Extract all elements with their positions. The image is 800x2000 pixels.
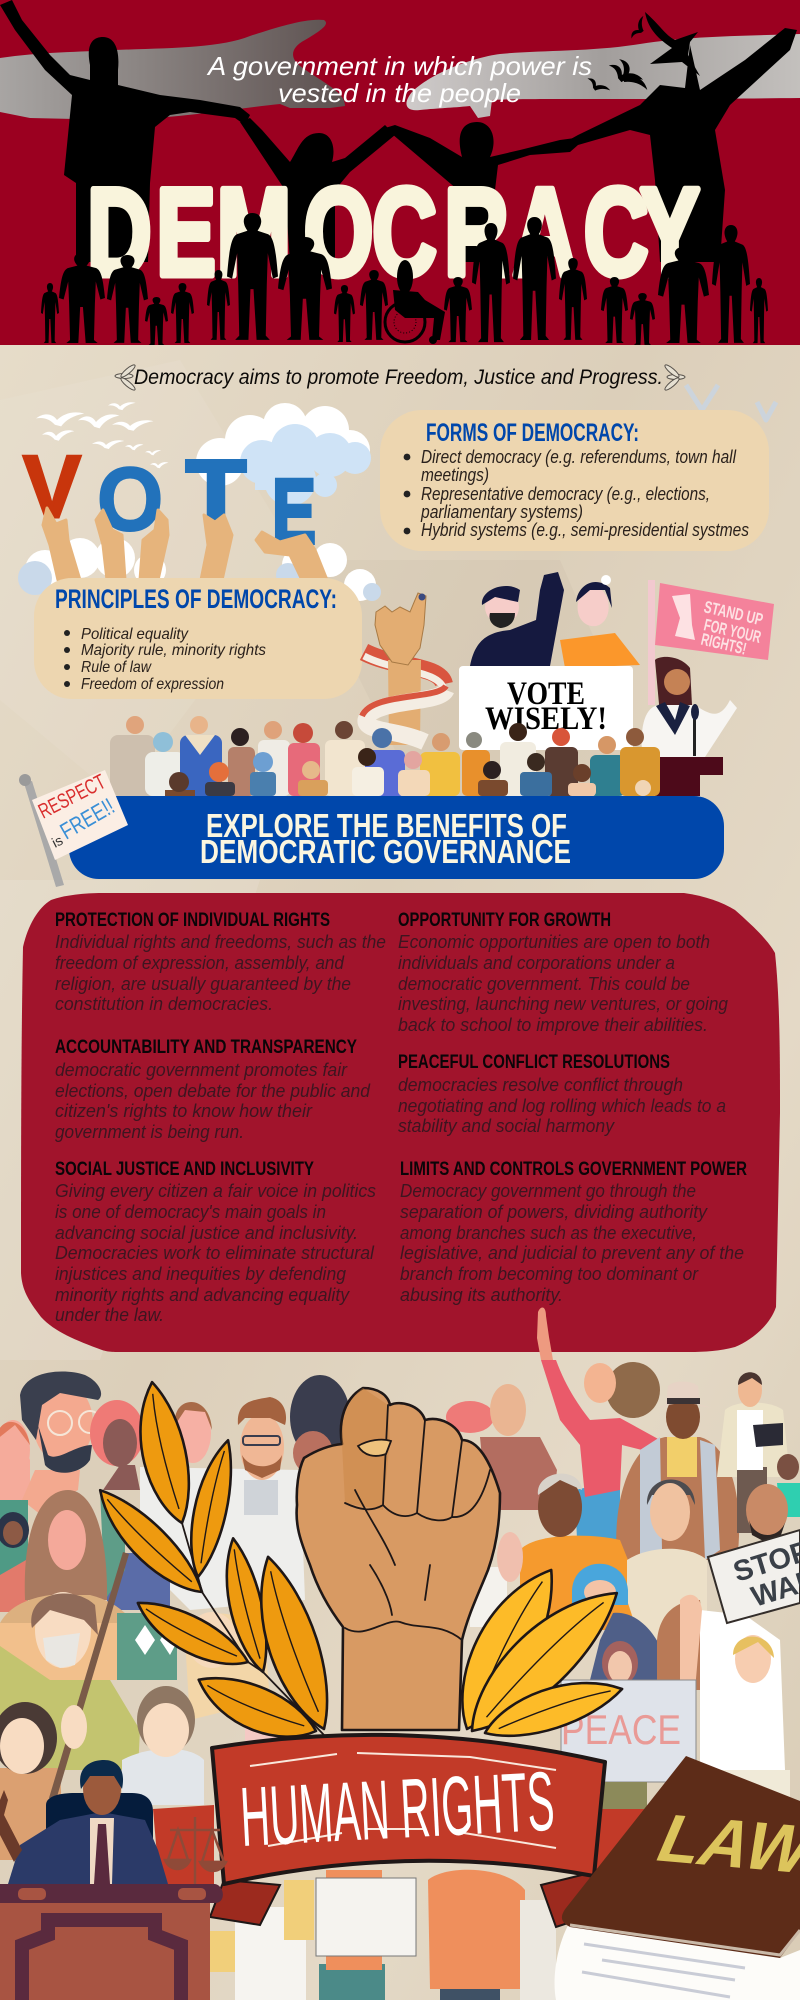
benefit: accountability: government is being run. [55, 1122, 244, 1142]
illustration: bottom crowd [0, 1360, 800, 2000]
banner: human rights [153, 1735, 645, 1927]
icon: raised fist [86, 1378, 634, 1753]
benefit: peaceful conflict: negotiating and log rolling which leads to a [398, 1096, 726, 1116]
benefit: peaceful conflict: PEACEFUL CONFLICT RESOLUTIONS [398, 1052, 670, 1073]
list: forms: meetings) [421, 465, 489, 485]
illustration: speaker at podium [642, 657, 737, 796]
wheelchair user [385, 260, 445, 344]
panel: forms of democracy [380, 410, 769, 551]
bottom people [209, 1870, 556, 2000]
right crowd [446, 1360, 800, 1820]
benefit: limits: abusing its authority. [400, 1285, 563, 1305]
header tagline [206, 51, 592, 108]
list: forms: Direct democracy (e.g. referendums, town hall [421, 447, 737, 467]
illustration: crowd [110, 716, 660, 796]
benefit: peaceful conflict: stability and social harmony [398, 1116, 615, 1136]
header tagline: A government in which power is [206, 51, 592, 81]
doves [584, 12, 700, 98]
tagline with ornaments: Democracy aims to promote Freedom, Justice and Progress. [134, 366, 663, 389]
benefit: individual rights: freedom of expression, assembly, and [55, 953, 345, 973]
flag: respect is free: RESPECT [35, 770, 110, 823]
sign: peace: PEACE [561, 1706, 681, 1753]
banner heading [200, 807, 571, 870]
benefit: peaceful conflict: democracies resolve conflict through [398, 1075, 683, 1095]
list: principles: Political equality [81, 626, 189, 643]
benefit: accountability: citizen's rights to know how their [55, 1101, 313, 1121]
banner heading: DEMOCRATIC GOVERNANCE [200, 833, 571, 870]
benefit: individual rights: religion, are usually guaranteed by the [55, 974, 351, 994]
placard: vote wisely [459, 666, 633, 750]
benefit: peaceful conflict [398, 1052, 726, 1136]
benefit: limits: branch from becoming too dominant or [400, 1264, 699, 1284]
VOTE letters: E [272, 461, 316, 563]
benefit: individual rights: PROTECTION OF INDIVIDUAL RIGHTS [55, 910, 330, 931]
title DEMOCRACY: DEMOCRACY [87, 163, 700, 301]
illustration: clouds [18, 403, 381, 601]
list: forms: Hybrid systems (e.g., semi-presidential systmes [421, 520, 749, 540]
sign: stop war [708, 1530, 800, 1623]
benefit: limits [400, 1159, 747, 1305]
icon: scales of justice [165, 1817, 226, 1890]
benefit: social justice [55, 1159, 376, 1325]
benefit: growth [398, 910, 728, 1035]
VOTE letters [23, 438, 316, 563]
list: forms [404, 447, 749, 540]
benefit: accountability: elections, open debate for the public and [55, 1081, 371, 1101]
benefit: individual rights: Individual rights and freedoms, such as the [55, 932, 386, 952]
benefit: individual rights [55, 910, 386, 1014]
flag: stand up for your rights: STAND UP [702, 597, 765, 629]
flag: respect is free: is [49, 832, 65, 851]
header red band [0, 0, 800, 345]
leaves [86, 1378, 634, 1753]
benefit: social justice: Democracies work to eliminate structural [55, 1243, 375, 1263]
benefit: social justice: SOCIAL JUSTICE AND INCLUSIVITY [55, 1159, 314, 1180]
sign: peace [561, 1680, 696, 1782]
list: principles: Rule of law [81, 659, 152, 676]
photo of reaching hands [0, 20, 800, 120]
header tagline: vested in the people [278, 78, 521, 108]
illustration: judge [0, 1760, 226, 2000]
benefit: growth: Economic opportunities are open to both [398, 932, 710, 952]
icon: inked finger with ribbon [362, 593, 446, 745]
list: principles: Majority rule, minority rights [81, 642, 266, 659]
benefit: growth: individuals and corporations under a [398, 953, 675, 973]
left crowd [0, 1372, 350, 1860]
list: forms: Representative democracy (e.g., elections, [421, 484, 710, 504]
VOTE letters: T [186, 443, 246, 543]
hands holding letters [43, 508, 327, 580]
silhouettes: adults holding hands [0, 0, 797, 262]
benefit: social justice: minority rights and advancing equality [55, 1285, 350, 1305]
illustration: protesters holding sign [459, 572, 640, 750]
VOTE letters: O [97, 449, 163, 550]
VOTE letters: V [23, 438, 81, 536]
silhouettes: family row [41, 213, 768, 345]
illustration: law book [555, 1756, 800, 2000]
list: forms: parliamentary systems) [420, 502, 583, 522]
benefit: limits: legislative, and judicial to prevent any of the [400, 1243, 744, 1263]
benefit: social justice: injustices and inequities by defending [55, 1264, 346, 1284]
heading: principles: PRINCIPLES OF DEMOCRACY: [55, 584, 337, 614]
white birds [36, 402, 168, 468]
benefit: accountability [55, 1037, 371, 1142]
benefit: limits: Democracy government go through the [400, 1181, 696, 1201]
benefit: individual rights: constitution in democracies. [55, 994, 273, 1014]
icon: raised hand over panel [537, 1307, 553, 1360]
benefit: social justice: is one of democracy's main goals in [55, 1202, 326, 1222]
benefit: limits: separation of powers, dividing authority [400, 1202, 708, 1222]
placard: vote wisely: VOTE [507, 676, 585, 712]
benefit: social justice: under the law. [55, 1305, 164, 1325]
flag: respect is free: FREE!! [56, 793, 119, 844]
benefit: growth: investing, launching new ventures, or going [398, 994, 728, 1014]
flag: respect is free [19, 770, 128, 887]
benefit: social justice: advancing social justice and inclusivity. [55, 1223, 358, 1243]
banner heading: EXPLORE THE BENEFITS OF [206, 807, 567, 844]
benefit: accountability: ACCOUNTABILITY AND TRANSPARENCY [55, 1037, 357, 1058]
flag: stand up for your rights: RIGHTS! [699, 630, 748, 659]
heading: forms: FORMS OF DEMOCRACY: [426, 419, 639, 447]
benefit: social justice: Giving every citizen a fair voice in politics [55, 1181, 376, 1201]
blue banner [69, 796, 724, 879]
list: principles [64, 626, 266, 693]
benefit: growth: democratic government. This could be [398, 974, 690, 994]
benefit: growth: back to school to improve their abilities. [398, 1015, 708, 1035]
panel: principles of democracy [34, 578, 362, 699]
pale birds top right [686, 385, 776, 434]
benefit: accountability: democratic government promotes fair [55, 1060, 348, 1080]
panel: benefits [21, 893, 780, 1352]
benefit: growth: OPPORTUNITY FOR GROWTH [398, 910, 611, 931]
benefit: limits: among branches such as the executive, [400, 1223, 697, 1243]
judge's bench [0, 1884, 223, 2000]
placard: vote wisely: WISELY! [485, 701, 607, 737]
flag: stand up for your rights: FOR YOUR [702, 615, 763, 647]
flag: stand up for your rights [648, 580, 774, 705]
list: principles: Freedom of expression [81, 676, 224, 693]
